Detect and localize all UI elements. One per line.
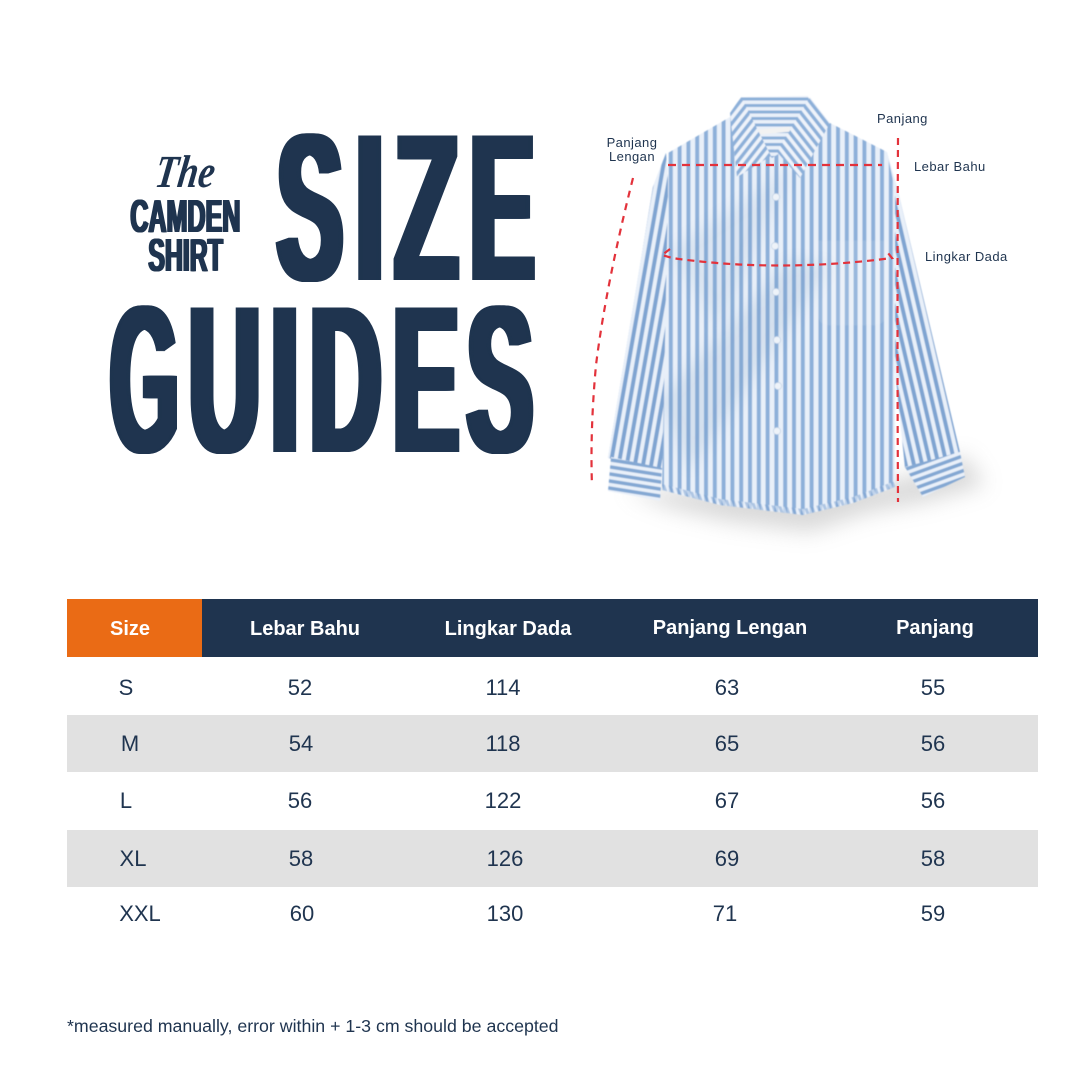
row XXL	[119, 901, 945, 926]
table header: Panjang Lengan	[653, 617, 807, 639]
row XL	[67, 830, 1038, 887]
hem band	[662, 481, 895, 515]
row XXL: XXL	[119, 901, 161, 926]
shirt illustration with measurement lines	[590, 96, 985, 539]
table header: Lebar Bahu	[250, 618, 360, 640]
collar inside	[741, 96, 816, 158]
measurement: panjang lengan	[592, 178, 633, 486]
table header: Lingkar Dada	[445, 618, 571, 640]
row L: L	[120, 788, 132, 813]
heading: size	[276, 90, 535, 325]
shirt	[608, 96, 965, 515]
table header	[67, 599, 1038, 657]
left cuff	[608, 457, 662, 501]
measurement: lebar bahu	[668, 164, 882, 166]
pocket	[817, 241, 888, 325]
size table	[67, 599, 1038, 926]
row XXL: 59	[921, 901, 945, 926]
heading: guides: D	[310, 262, 381, 497]
row S: 52	[288, 675, 312, 700]
heading: guides: I	[271, 262, 298, 497]
row L: 67	[715, 788, 739, 813]
collar left	[730, 97, 771, 177]
body	[662, 117, 895, 515]
row XL: 126	[487, 846, 523, 871]
row L: 56	[921, 788, 945, 813]
table header: Size	[110, 618, 150, 640]
logo word camden: CAMDEN	[130, 190, 240, 242]
heading: guides: U	[189, 262, 260, 497]
row M: 54	[289, 731, 313, 756]
collar label	[758, 127, 790, 135]
row M: 56	[921, 731, 945, 756]
row L: 122	[485, 788, 521, 813]
row XL: 58	[289, 846, 313, 871]
row M: 65	[715, 731, 739, 756]
label: lingkar dada: Lingkar Dada	[925, 249, 1008, 264]
row S: 55	[921, 675, 945, 700]
row S: S	[119, 675, 133, 700]
heading: guides	[110, 262, 534, 497]
logo word shirt: SHIRT	[148, 229, 223, 281]
right cuff	[905, 452, 965, 497]
row XXL: 130	[487, 901, 523, 926]
drop shadow	[625, 455, 985, 532]
heading: guides: G	[110, 262, 179, 497]
heading: size: I	[356, 90, 383, 325]
heading: size: Z	[395, 90, 458, 325]
collar right	[777, 97, 830, 178]
row XL: 58	[921, 846, 945, 871]
table header: Panjang	[896, 617, 974, 639]
row M: 118	[485, 731, 521, 756]
label: panjang lengan: Panjang	[607, 135, 657, 150]
heading: guides: S	[467, 262, 533, 497]
title: The Camden Shirt logo	[130, 146, 240, 281]
row S	[119, 675, 945, 700]
soft fabric shadow	[664, 183, 824, 463]
row S: 114	[485, 675, 521, 700]
heading: guides: E	[393, 262, 459, 497]
row XL: XL	[120, 846, 146, 871]
row M	[67, 715, 1038, 772]
label: panjang: Panjang	[877, 111, 928, 126]
measurement: lingkar dada	[662, 249, 892, 266]
label: lebar bahu: Lebar Bahu	[914, 159, 986, 174]
left sleeve	[608, 153, 674, 470]
row XL: 69	[715, 846, 739, 871]
heading: size: S	[277, 90, 343, 325]
row M: M	[121, 731, 139, 756]
label: panjang lengan: Lengan	[609, 149, 655, 164]
row XXL: 60	[290, 901, 314, 926]
buttons	[771, 193, 782, 435]
label: panjang lengan	[607, 135, 657, 164]
heading: size: E	[470, 90, 534, 325]
row L: 56	[288, 788, 312, 813]
right sleeve	[887, 152, 960, 468]
logo script word: The	[152, 146, 219, 197]
footnote: *measured manually, error within + 1-3 cm should be accepted	[67, 1016, 558, 1036]
measurement: panjang	[896, 138, 899, 502]
row L	[120, 788, 945, 813]
row XXL: 71	[713, 901, 737, 926]
header cell: size	[67, 599, 202, 657]
row S: 63	[715, 675, 739, 700]
